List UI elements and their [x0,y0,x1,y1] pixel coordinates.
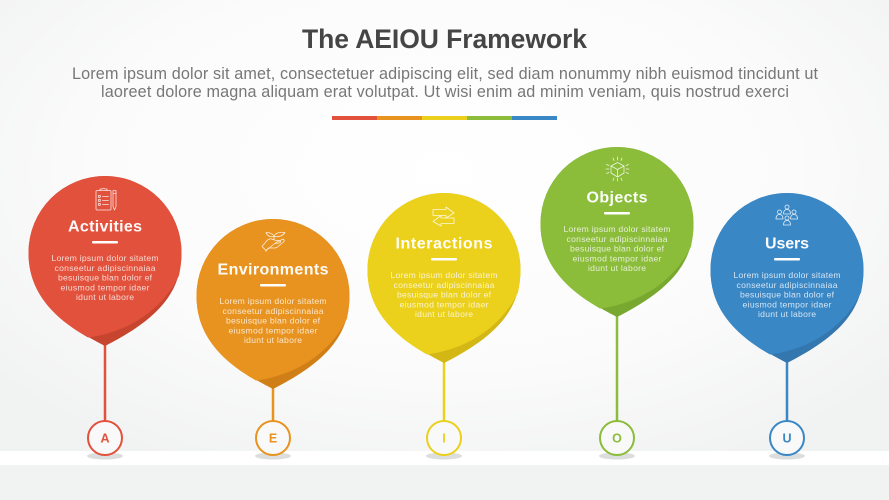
body text: conseetur adipiscinnaiaa [566,234,668,244]
body text: eiusmod tempor idaer [742,299,832,309]
heading: Environments [218,262,329,278]
body text: Lorem ipsum dolor sitatem [220,296,326,306]
body text: besuisque blan dolor ef [740,290,835,300]
body text: eiusmod tempor idaer [60,282,150,292]
letter circle [427,421,461,455]
accent bar [604,212,630,214]
stem [786,357,788,422]
body text: besuisque blan dolor ef [58,272,153,282]
accent bar [774,258,800,260]
body text [220,296,326,345]
panel: Users [710,193,864,460]
letter circle [770,421,804,455]
panel: Interactions [368,193,520,460]
icon: hand with plant [262,232,285,251]
icon: glowing cube [606,157,629,181]
subtitle: Lorem ipsum dolor sit amet, consectetuer adipiscing elit, sed diam nonummy nibh euismod tincidunt ut [72,65,818,83]
balloon [710,193,864,363]
body text: idunt ut labore [758,309,816,319]
accent bar [260,284,286,286]
body text: besuisque blan dolor ef [226,316,321,326]
subtitle [72,65,818,101]
letter circle: E [269,432,277,446]
icon: clipboard and pencil [96,188,116,210]
base shadow [599,452,635,460]
letter circle: A [100,432,110,446]
body text: idunt ut labore [76,292,134,302]
body text [564,224,670,273]
body text: Lorem ipsum dolor sitatem [390,270,498,280]
accent bar [431,258,457,260]
letter circle [256,421,290,455]
floor band [0,451,889,465]
body text: besuisque blan dolor ef [570,244,665,254]
stem [272,383,274,422]
subtitle: laoreet dolore magna aliquam erat volutpat. Ut wisi enim ad minim veniam, quis nostrud exerci [101,83,789,101]
body text: eiusmod tempor idaer [400,299,489,309]
letter circle: I [442,432,446,446]
stem [443,357,445,422]
body text: conseetur adipiscinnaiaa [394,280,495,290]
body text: besuisque blan dolor ef [397,290,492,300]
body text: conseetur adipiscinnaiaa [222,306,324,316]
stem [616,311,618,422]
panel: Environments [196,219,350,460]
body text: Lorem ipsum dolor sitatem [734,270,840,280]
title: The AEIOU Framework [302,24,587,54]
letter circle: O [612,432,622,446]
body text: Lorem ipsum dolor sitatem [52,253,158,263]
base shadow [255,452,291,460]
heading: Interactions [396,236,493,252]
balloon [368,193,520,363]
balloon [28,176,182,346]
icon: exchange arrows [433,207,454,226]
letter circle [88,421,122,455]
body text: idunt ut labore [244,335,302,345]
panel: Activities [28,176,182,460]
icon: group of users [776,205,798,225]
body text: conseetur adipiscinnaiaa [54,263,156,273]
body text [734,270,840,319]
letter circle: U [782,432,792,446]
panel: Objects [540,147,694,460]
letter circle [600,421,634,455]
base shadow [426,452,462,460]
heading: Objects [586,190,648,206]
base shadow [87,452,123,460]
body text: conseetur adipiscinnaiaa [736,280,838,290]
body text [52,253,158,302]
base shadow [769,452,805,460]
heading: Users [765,236,809,252]
stem [104,340,106,422]
body text: Lorem ipsum dolor sitatem [564,224,670,234]
heading: Activities [68,218,142,236]
balloon [540,147,694,317]
balloon [196,219,350,389]
body text: eiusmod tempor idaer [572,253,662,263]
rainbow divider [332,116,557,120]
body text: eiusmod tempor idaer [228,325,318,335]
body text: idunt ut labore [588,263,646,273]
body text [390,270,498,319]
body text: idunt ut labore [415,309,473,319]
accent bar [92,241,118,244]
